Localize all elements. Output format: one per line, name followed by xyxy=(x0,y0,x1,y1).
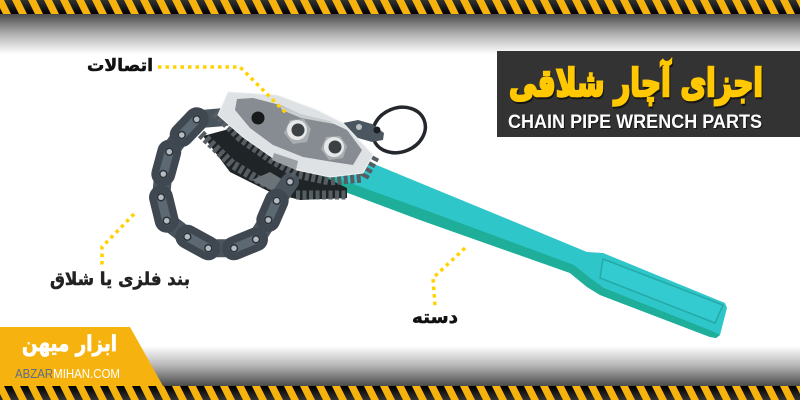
small link xyxy=(343,120,384,142)
callout line: handle xyxy=(433,248,465,306)
english title: CHAIN PIPE WRENCH PARTS xyxy=(508,111,762,133)
logo url: ABZARMIHAN.COM xyxy=(15,366,120,381)
bottom hazard band xyxy=(0,346,800,400)
label: handle: دسته xyxy=(412,307,458,328)
metal chain xyxy=(158,116,294,252)
wrench handle xyxy=(300,150,727,338)
title panel xyxy=(497,51,800,137)
callout line: fittings xyxy=(158,67,288,115)
logo badge xyxy=(0,327,163,386)
label: fittings: اتصالات xyxy=(87,56,153,76)
ring xyxy=(366,99,432,161)
callout line: chain xyxy=(102,214,134,266)
logo persian wordmark: ابزار میهن xyxy=(22,332,117,357)
wrench head xyxy=(216,92,375,180)
label: metal band or chain: بند فلزی یا شلاق xyxy=(50,269,190,290)
top hazard band xyxy=(0,0,800,54)
illustration: chain pipe wrench xyxy=(158,92,727,338)
bolts xyxy=(284,119,347,160)
rear jaw xyxy=(201,126,347,200)
